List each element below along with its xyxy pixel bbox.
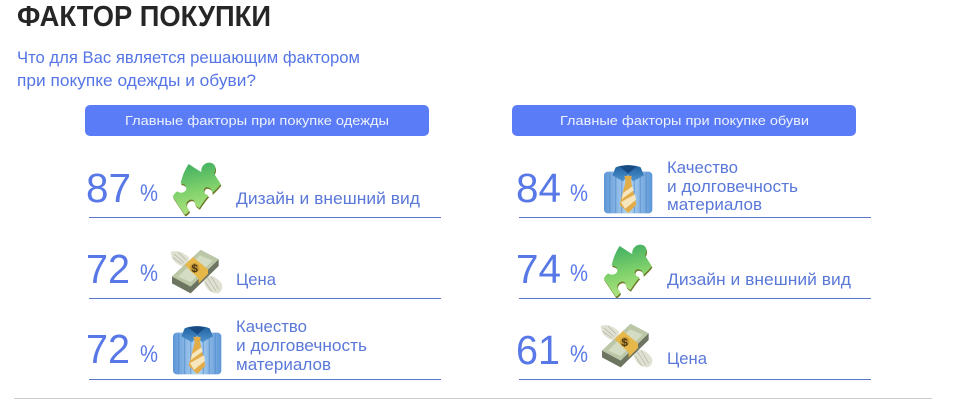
row: 84% quality: материалов [667,196,762,214]
panel: clothing factors [85,105,441,380]
row: 87% design: Дизайн и внешний вид [236,190,420,208]
row: 61% price: 61 [516,327,560,373]
row: 84% quality: % [570,180,588,207]
subtitle question [17,48,360,90]
row: 84% quality: и долговечность [667,178,798,196]
row: 72% quality: материалов [236,356,331,374]
row: 84% quality [516,159,871,218]
row: 72% price: Цена [236,271,277,289]
row: 74% design: % [570,260,588,287]
row: 72% quality: % [140,341,158,368]
row: 61% price [516,324,871,380]
row: 72% price: % [140,260,158,287]
row: 72% quality [86,318,441,380]
row: 72% quality: и долговечность [236,337,367,355]
title: ФАКТОР ПОКУПКИ [17,1,271,33]
row: 87% design [86,163,441,218]
row: 72% price: 72 [86,246,130,292]
row: 61% price: Цена [667,350,708,368]
row: 72% price [86,246,441,298]
clothing header button: Главные факторы при покупке одежды [125,113,389,128]
panel: footwear factors [512,105,871,380]
row: 84% quality: 84 [516,165,561,211]
row: 74% design: 74 [516,246,561,292]
clothing header button [85,105,429,136]
footwear header button: Главные факторы при покупке обуви [560,113,809,128]
subtitle question: при покупке одежды и обуви? [17,71,256,90]
row: 84% quality: Качество [667,159,738,177]
row: 87% design: 87 [86,165,131,211]
row: 72% quality: 72 [86,326,130,372]
row: 72% quality: Качество [236,318,307,336]
footwear header button [512,105,856,136]
row: 87% design: % [140,180,158,207]
subtitle question: Что для Вас является решающим фактором [17,48,360,67]
row: 74% design [516,245,871,298]
row: 74% design: Дизайн и внешний вид [667,271,851,289]
row: 61% price: % [570,341,588,368]
